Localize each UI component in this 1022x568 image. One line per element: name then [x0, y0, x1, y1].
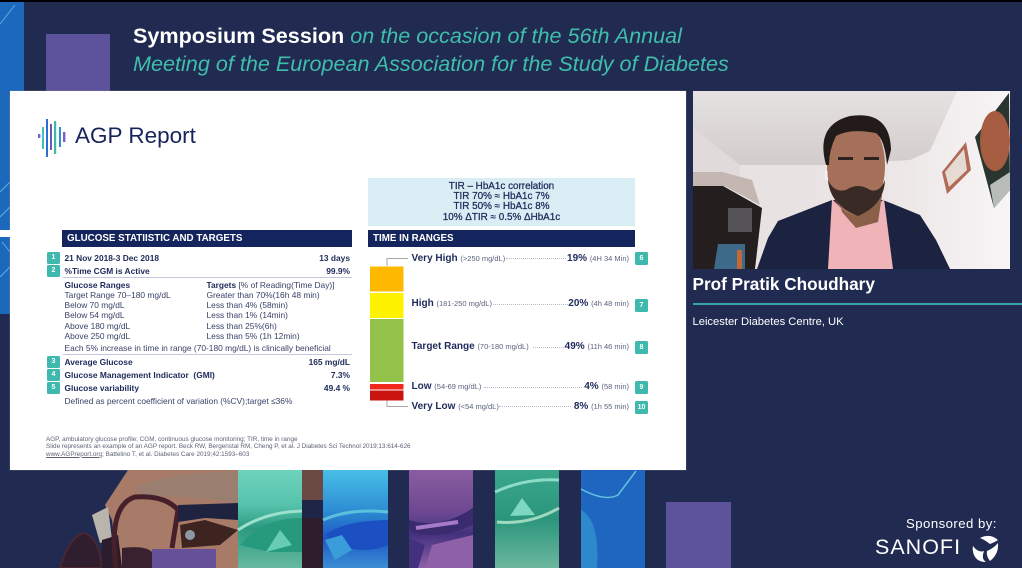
- row: high: High (181-250 mg/dL): [412, 298, 492, 309]
- badge 1: 1: [52, 254, 55, 261]
- speaker jacket: [757, 200, 950, 269]
- note: coefficient of variation: Defined as percent coefficient of variation (%CV);target ≤36%: [64, 396, 292, 406]
- value: target range: 49% (11h 46 min): [565, 341, 629, 352]
- footnote: AGP, ambulatory glucose profile; CGM, continuous glucose monitoring; TIR, time in range: [46, 436, 298, 443]
- badge 3: 3: [52, 358, 55, 365]
- value: variability: 49.4 %: [324, 382, 350, 392]
- text block: glucose ranges: Above 180 mg/dL: [64, 321, 130, 331]
- text block: targets: Less than 25%(6h): [206, 321, 277, 331]
- badge 9: [635, 381, 648, 394]
- chart: stacked time in range bar: [370, 258, 408, 407]
- value: GMI: 7.3%: [331, 370, 350, 380]
- footnote: [46, 436, 411, 458]
- decorative purple block top: [46, 34, 110, 92]
- boxes on bookcase: [693, 172, 760, 205]
- panel: slide: [10, 91, 686, 470]
- value: very low: 8% (1h 55 min): [574, 400, 629, 412]
- title: Symposium Session on the occasion of the 56th Annual: [133, 23, 682, 48]
- value: days: 13 days: [319, 253, 350, 263]
- heading: AGP Report: AGP Report: [75, 123, 196, 148]
- small purple block: [152, 549, 216, 568]
- speaker neck: [838, 195, 882, 228]
- icon: AGP waveform logo: [38, 119, 66, 157]
- badge 7: 7: [640, 302, 643, 309]
- speaker hair: [823, 115, 891, 165]
- badge 1: [47, 252, 60, 264]
- text block: glucose ranges: Below 54 mg/dL: [64, 310, 125, 320]
- value: high: 20% (4h 48 min): [568, 298, 629, 309]
- badge 5: 5: [52, 384, 55, 391]
- top black strip: [0, 0, 1022, 2]
- value: low: 4% (58 min): [584, 381, 629, 392]
- badge 5: [47, 382, 60, 394]
- text block: targets: [206, 280, 335, 341]
- text block: glucose ranges: Target Range 70–180 mg/dL: [64, 290, 171, 300]
- badge 10: [635, 401, 648, 414]
- icon: Sanofi bird: [972, 536, 998, 562]
- white notch at left edge: [0, 230, 10, 237]
- badge 4: [47, 369, 60, 381]
- row: time CGM active: %Time CGM is Active: [64, 266, 150, 276]
- callout: TIR HbA1c correlation: TIR 50% ≈ HbA1c 8%: [454, 201, 549, 212]
- row: glucose variability: Glucose variability: [64, 382, 139, 392]
- speaker shirt: [828, 199, 893, 269]
- callout: TIR HbA1c correlation: 10% ΔTIR ≈ 0.5% ΔHbA1c: [443, 212, 560, 223]
- row: GMI: Glucose Management Indicator (GMI): [64, 370, 215, 380]
- badge 7: [635, 299, 648, 312]
- text block: targets: Less than 1% (14min): [206, 310, 288, 320]
- bookcase: [693, 186, 762, 269]
- text block: targets: Less than 5% (1h 12min): [206, 331, 300, 341]
- badge 2: [47, 264, 60, 276]
- row: very low: Very Low (<54 mg/dL): [412, 400, 499, 412]
- badge 8: 8: [640, 344, 643, 351]
- sponsor name: Sanofi: SANOFI: [875, 535, 961, 559]
- note: clinically beneficial: Each 5% increase in time in range (70-180 mg/dL) is clinically beneficial: [64, 343, 331, 353]
- text block: glucose ranges: Above 250 mg/dL: [64, 331, 130, 341]
- heading: time in ranges: TIME IN RANGES: [373, 233, 454, 244]
- face strip teal: [238, 470, 302, 568]
- image band: tinted faces: [59, 470, 731, 568]
- photo: speaker webcam: [693, 91, 1010, 269]
- row: target range: Target Range (70-180 mg/dL): [412, 341, 529, 352]
- title: [133, 23, 729, 76]
- speaker head: [827, 117, 885, 215]
- badge 8: [635, 341, 648, 354]
- face strip brown: [302, 470, 323, 568]
- badge 6: 6: [640, 255, 643, 262]
- row: very high: Very High (>250 mg/dL): [412, 253, 505, 264]
- purple block bottom right: [666, 502, 731, 568]
- text block: targets: Less than 4% (58min): [206, 300, 288, 310]
- value: very high: 19% (4H 34 Min): [567, 253, 629, 264]
- face strip purple: [409, 470, 473, 568]
- text block: targets: Greater than 70%(16h 48 min): [206, 290, 320, 300]
- callout: TIR HbA1c correlation: TIR – HbA1c correlation: [449, 180, 554, 192]
- wall frame: [942, 142, 971, 194]
- text block: glucose ranges: Below 70 mg/dL: [64, 300, 125, 310]
- row: average glucose: Average Glucose: [64, 356, 133, 366]
- face strip green: [495, 470, 559, 568]
- badge 9: 9: [640, 384, 643, 391]
- footnote: www.AGPreport.org; Battelino T, et al. Diabetes Care 2019;42:1593–603: [46, 451, 249, 458]
- badge 3: [47, 356, 60, 368]
- heading: glucose statistics: GLUCOSE STATIISTIC AND TARGETS: [67, 233, 242, 244]
- left blue decorative image strip: [0, 2, 24, 314]
- badge 10: 10: [638, 404, 645, 411]
- text block: glucose ranges: Glucose Ranges: [64, 280, 130, 290]
- badge 2: 2: [52, 266, 55, 274]
- speaker beard: [828, 180, 885, 216]
- speaker name: Prof Pratik Choudhary: [692, 274, 875, 294]
- footnote: Slide represents an example of an AGP report. Beck RW, Bergenstal RM, Cheng P, et al. J Diabetes Sci Technol 2019;13:614-626: [46, 443, 411, 450]
- text block: glucose ranges: [64, 280, 171, 341]
- heading: glucose statistics: [62, 230, 352, 247]
- text block: targets: Targets [% of Reading(Time Day)]: [206, 280, 335, 290]
- value: average glucose: 165 mg/dL: [309, 356, 350, 366]
- row: low: Low (54-69 mg/dL): [412, 381, 481, 392]
- badge 4: 4: [52, 371, 55, 378]
- callout: TIR HbA1c correlation: TIR 70% ≈ HbA1c 7%: [454, 191, 549, 202]
- wall poster: [975, 93, 1010, 208]
- sponsor label: Sponsored by:: [906, 516, 997, 530]
- heading: time in ranges: [368, 230, 635, 247]
- row: date range: 21 Nov 2018-3 Dec 2018: [64, 253, 159, 263]
- speaker affiliation: Leicester Diabetes Centre, UK: [692, 316, 844, 328]
- divider teal: [693, 303, 1022, 305]
- title: Meeting of the European Association for the Study of Diabetes: [133, 51, 729, 76]
- face strip blue: [323, 470, 388, 568]
- face image left: [60, 470, 238, 568]
- face strip blue right: [581, 470, 645, 568]
- callout: TIR HbA1c correlation: [368, 178, 635, 226]
- value: CGM active: 99.9%: [326, 266, 350, 276]
- badge 6: [635, 252, 648, 265]
